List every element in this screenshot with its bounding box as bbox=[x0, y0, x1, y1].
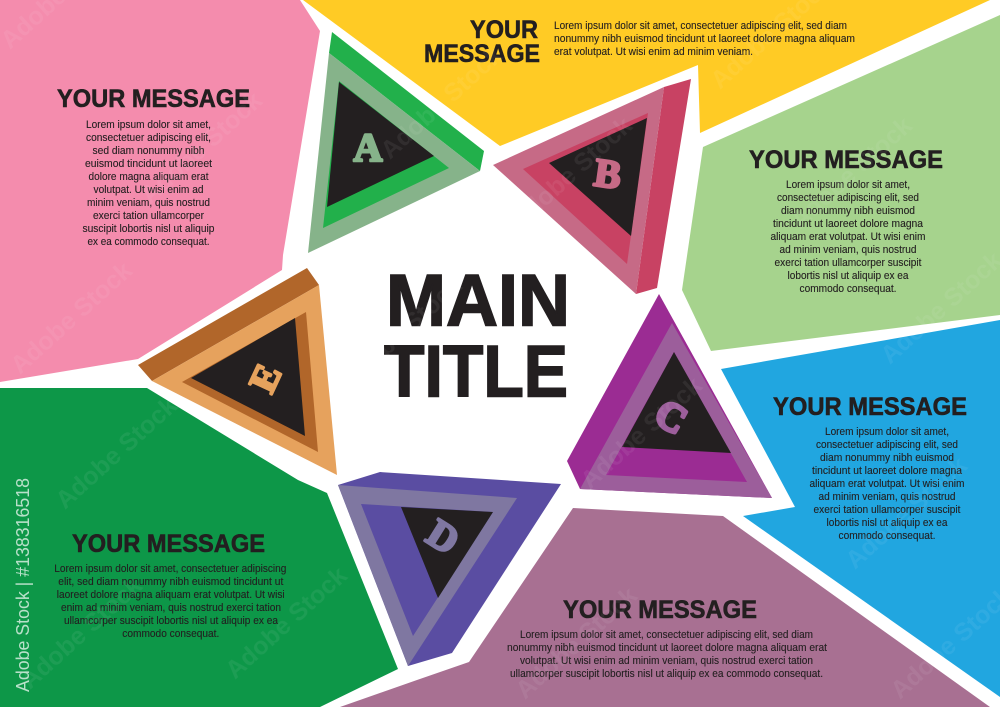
heading: mauve panel: YOUR MESSAGE bbox=[563, 596, 757, 624]
vertical stock credit: Adobe Stock | #138316518 bbox=[13, 478, 33, 692]
text block: light green panel: commodo consequat. bbox=[800, 283, 896, 295]
text block: light green panel: exerci tation ullamcorper suscipit bbox=[774, 257, 922, 269]
text block: blue panel: diam nonummy nibh euismod bbox=[820, 452, 954, 464]
text block: pink panel: sed diam nonummy nibh bbox=[92, 145, 204, 157]
text block: pink panel bbox=[82, 119, 214, 248]
text block: blue panel: ad minim veniam, quis nostrud bbox=[818, 491, 956, 503]
text block: mauve panel: ullamcorper suscipit lobortis nisl ut aliquip ex ea commodo consequat. bbox=[510, 668, 823, 680]
text block: green panel: commodo consequat. bbox=[122, 628, 219, 640]
text block: green panel: elit, sed diam nonummy nibh euismod tincidunt ut bbox=[58, 576, 283, 588]
stock watermark: Adobe Stock bbox=[510, 581, 643, 704]
triangle B bbox=[493, 79, 691, 294]
stock watermark: Adobe Stock bbox=[220, 561, 353, 684]
text block: green panel: enim ad minim veniam, quis nostrud exerci tation bbox=[61, 602, 281, 614]
triangle D bbox=[338, 472, 561, 666]
text block: blue panel bbox=[810, 426, 964, 542]
letter D: D bbox=[419, 510, 467, 563]
stock watermark: Adobe Stock bbox=[335, 271, 468, 394]
text block: light green panel: aliquam erat volutpat. Ut wisi enim bbox=[770, 231, 926, 243]
text block: light green panel: consectetuer adipiscing elit, sed bbox=[777, 192, 919, 204]
triangle C bbox=[567, 294, 772, 498]
text block: pink panel: euismod tincidunt ut laoreet bbox=[85, 158, 212, 170]
text block: mauve panel: Lorem ipsum dolor sit amet, consectetuer adipiscing elit, sed diam bbox=[520, 629, 813, 641]
text block: pink panel: dolore magna aliquam erat bbox=[88, 171, 208, 183]
text block: mauve panel: nonummy nibh euismod tincidunt ut laoreet dolore magna aliquam erat bbox=[507, 642, 827, 654]
stock watermark: Adobe Stock bbox=[5, 256, 138, 379]
text block: pink panel: exerci tation ullamcorper bbox=[93, 210, 204, 222]
text block: pink panel: ex ea commodo consequat. bbox=[88, 236, 210, 248]
heading: yellow panel: YOUR bbox=[470, 16, 538, 44]
heading: yellow panel: MESSAGE bbox=[424, 40, 540, 68]
panel: blue message bbox=[721, 320, 1000, 697]
letter C: C bbox=[647, 390, 695, 443]
heading: light green panel: YOUR MESSAGE bbox=[749, 146, 943, 174]
text block: blue panel: exerci tation ullamcorper suscipit bbox=[814, 504, 960, 516]
text block: yellow panel: nonummy nibh euismod tincidunt ut laoreet dolore magna aliquam bbox=[554, 33, 855, 45]
text block: blue panel: aliquam erat volutpat. Ut wisi enim bbox=[810, 478, 964, 490]
heading: green panel: YOUR MESSAGE bbox=[72, 530, 265, 558]
main title: TITLE bbox=[384, 332, 568, 412]
text block: mauve panel: volutpat. Ut wisi enim ad minim veniam, quis nostrud exerci tation bbox=[520, 655, 813, 667]
panel: pink message bbox=[0, 0, 320, 382]
heading: pink panel: YOUR MESSAGE bbox=[57, 85, 250, 113]
text block: green panel: ullamcorper suscipit lobortis nisl ut aliquip ex ea bbox=[64, 615, 279, 627]
stock watermark: Adobe Stock bbox=[505, 111, 638, 234]
text block: blue panel: consectetuer adipiscing elit, sed bbox=[816, 439, 958, 451]
text block: green panel: Lorem ipsum dolor sit amet, consectetuer adipiscing bbox=[54, 563, 286, 575]
text block: light green panel: Lorem ipsum dolor sit amet, bbox=[786, 179, 910, 191]
letter E: E bbox=[242, 358, 290, 399]
panel: mauve message bbox=[340, 508, 990, 707]
stock watermark: Adobe Stock bbox=[135, 86, 268, 209]
text block: light green panel: lobortis nisl ut aliquip ex ea bbox=[788, 270, 909, 282]
text block: blue panel: commodo consequat. bbox=[838, 530, 936, 542]
triangle E bbox=[138, 268, 337, 475]
text block: pink panel: Lorem ipsum dolor sit amet, bbox=[86, 119, 211, 131]
letter A: A bbox=[354, 125, 383, 170]
text block: light green panel: tincidunt ut laoreet dolore magna bbox=[773, 218, 924, 230]
text block: blue panel: tincidunt ut laoreet dolore magna bbox=[812, 465, 963, 477]
text block: pink panel: minim veniam, quis nostrud bbox=[87, 197, 210, 209]
text block: blue panel: lobortis nisl ut aliquip ex ea bbox=[826, 517, 948, 529]
stock watermark: Adobe Stock bbox=[15, 571, 148, 694]
stock watermark: Adobe Stock bbox=[840, 451, 973, 574]
text block: blue panel: Lorem ipsum dolor sit amet, bbox=[825, 426, 949, 438]
stock watermark: Adobe Stock bbox=[375, 41, 508, 164]
text block: green panel bbox=[54, 563, 286, 640]
text block: light green panel bbox=[770, 179, 926, 295]
text block: light green panel: diam nonummy nibh euismod bbox=[781, 205, 915, 217]
text block: mauve panel bbox=[507, 629, 827, 680]
text block: light green panel: ad minim veniam, quis nostrud bbox=[780, 244, 916, 256]
panel: green message bbox=[0, 388, 398, 707]
text block: pink panel: volutpat. Ut wisi enim ad bbox=[94, 184, 204, 196]
panel: light green message bbox=[682, 15, 1000, 351]
heading: blue panel: YOUR MESSAGE bbox=[773, 393, 967, 421]
text block: yellow panel: Lorem ipsum dolor sit amet, consectetuer adipiscing elit, sed diam bbox=[554, 20, 847, 32]
stock watermark: Adobe Stock bbox=[785, 111, 918, 234]
text block: yellow panel bbox=[554, 20, 855, 58]
main title: MAIN bbox=[386, 260, 570, 342]
stock watermark: Adobe Stock bbox=[50, 391, 183, 514]
letter B: B bbox=[592, 149, 624, 198]
text block: pink panel: consectetuer adipiscing elit, bbox=[86, 132, 211, 144]
text block: yellow panel: erat volutpat. Ut wisi enim ad minim veniam. bbox=[554, 46, 753, 58]
text block: pink panel: suscipit lobortis nisl ut aliquip bbox=[82, 223, 214, 235]
triangle A bbox=[308, 32, 484, 253]
stock watermark: Adobe Stock bbox=[575, 371, 708, 494]
panel: yellow message bbox=[303, 0, 990, 146]
text block: green panel: laoreet dolore magna aliquam erat volutpat. Ut wisi bbox=[57, 589, 285, 601]
